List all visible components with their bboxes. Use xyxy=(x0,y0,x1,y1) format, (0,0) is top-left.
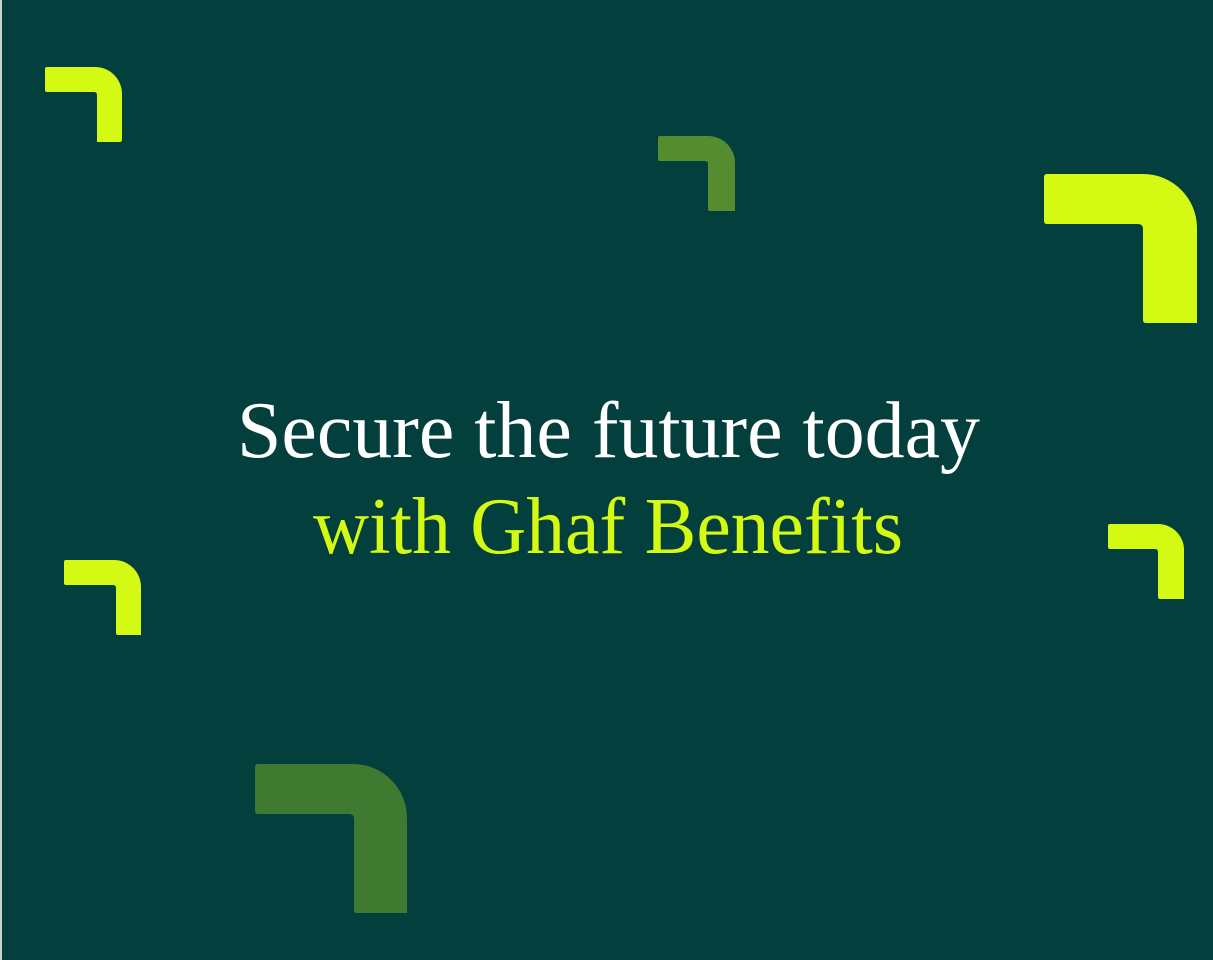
icon: green corner top-center xyxy=(658,136,735,211)
title line 2: with Ghaf Benefits xyxy=(313,483,903,571)
icon: green large corner bottom xyxy=(255,764,407,913)
icon: lime corner right-middle xyxy=(1108,524,1184,599)
title line 1: Secure the future today xyxy=(237,387,980,475)
icon: lime large corner top-right xyxy=(1044,174,1197,323)
icon: lime corner left-middle xyxy=(64,560,141,635)
title xyxy=(237,387,980,571)
icon: lime corner top-left xyxy=(45,67,122,142)
